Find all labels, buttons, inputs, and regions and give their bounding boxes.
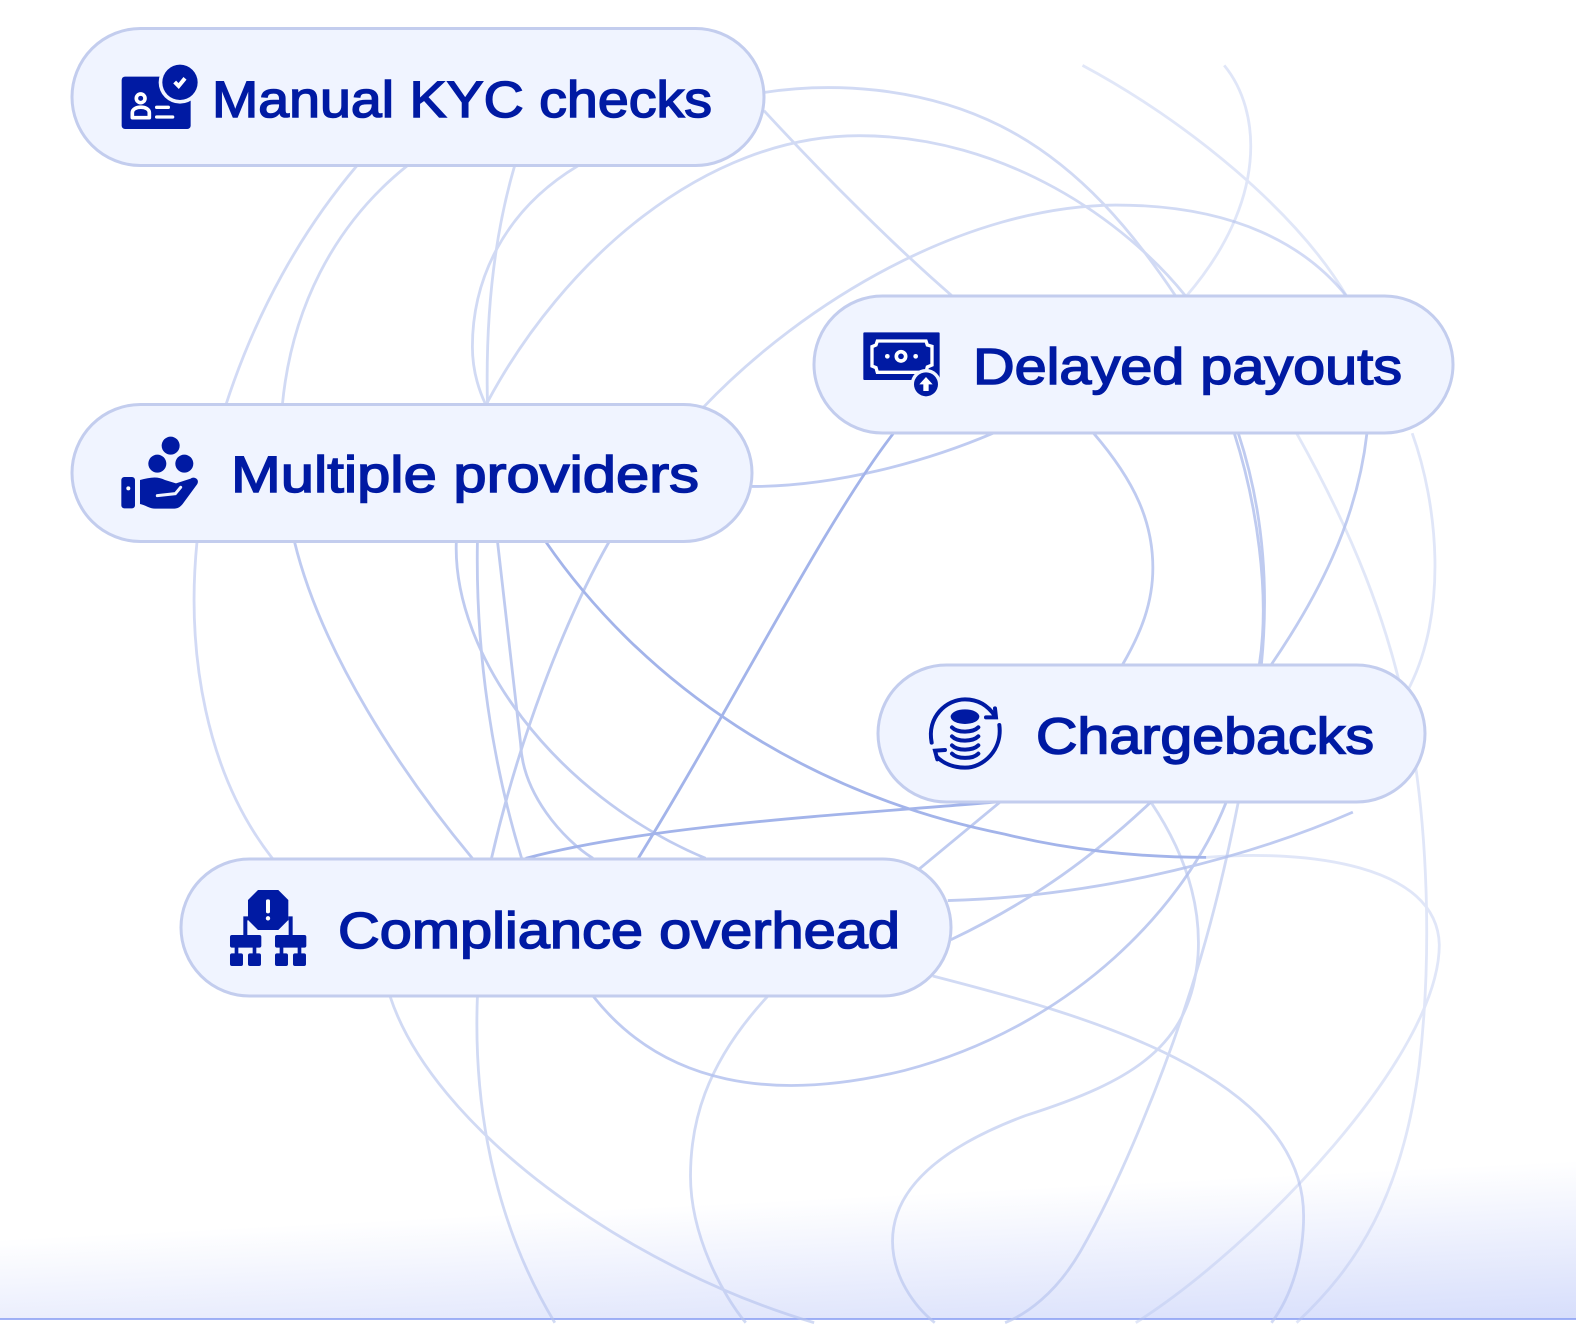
pill: Multiple providers [72,404,752,542]
pill: Delayed payouts [814,296,1453,433]
label: Compliance overhead: Compliance overhead [338,902,900,959]
pill: Manual KYC checks [72,28,764,166]
icon: banknote with upload arrow [863,332,941,400]
label: Delayed payouts: Delayed payouts [973,338,1402,395]
network of tangled connection curves [194,65,1439,1323]
icon: hand holding coins [121,437,198,509]
bottom gradient band [0,1140,1576,1320]
pill: Chargebacks [878,665,1425,802]
icon: ID card with check badge [122,61,201,129]
icon: coin stack with circular arrows [931,699,1000,768]
label: Multiple providers: Multiple providers [231,446,699,503]
label: Manual KYC checks: Manual KYC checks [212,71,712,128]
pill: Compliance overhead [181,859,951,996]
icon: alert octagon with hierarchy [230,890,306,966]
label: Chargebacks: Chargebacks [1036,708,1374,764]
